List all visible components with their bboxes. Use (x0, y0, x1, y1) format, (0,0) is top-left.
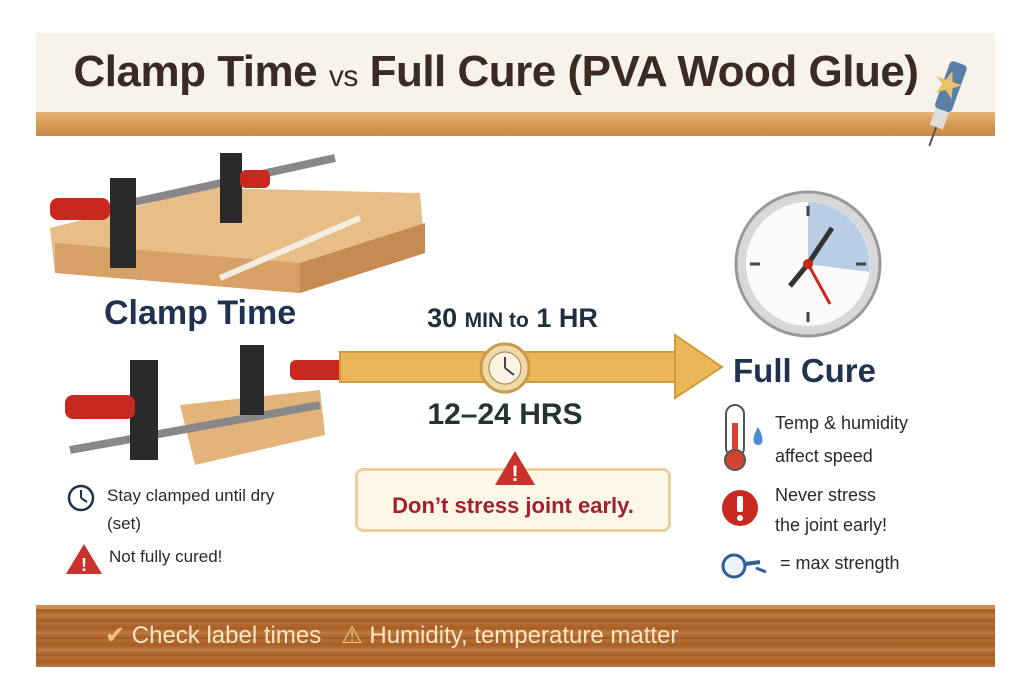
text: temp humidity: Temp & humidity (775, 413, 908, 433)
footer wood bar (36, 605, 995, 667)
text: stay clamped: (set) (107, 514, 141, 533)
text: not fully cured: Not fully cured! (109, 547, 222, 566)
clamp time value: 30 MIN to 1 HR (427, 303, 598, 333)
icon: clock outline (68, 484, 94, 512)
callout: warning: Don’t stress joint early. (392, 493, 634, 518)
text: temp humidity: affect speed (775, 446, 873, 466)
text: stay clamped (107, 486, 274, 533)
illustration: top clamp and boards (50, 153, 425, 293)
header panel (36, 33, 995, 136)
heading: full cure: Full Cure (733, 352, 876, 389)
icon: small clock (481, 344, 529, 392)
text: never stress (775, 485, 887, 535)
icon: warning triangle: ! (511, 461, 519, 486)
wood strip (36, 112, 995, 136)
icon: magnifier (722, 554, 766, 578)
text: never stress: Never stress (775, 485, 876, 505)
text: temp humidity (775, 413, 908, 466)
icon: big clock (734, 190, 882, 338)
heading: clamp time: Clamp Time (104, 294, 296, 332)
icon: red warning: ! (81, 555, 87, 575)
text: stay clamped: Stay clamped until dry (107, 486, 274, 505)
icon: red alert (722, 490, 758, 526)
callout: warning (355, 468, 671, 532)
icon: glue brush (928, 61, 967, 146)
icon: red warning (66, 544, 102, 575)
full cure value: 12–24 HRS (427, 398, 583, 431)
footer text: ✔ Check label times ⚠ Humidity, temperature matter (105, 622, 678, 649)
title: Clamp Time vs Full Cure (PVA Wood Glue) (74, 47, 918, 96)
illustration: bottom clamp (65, 345, 339, 465)
icon: warning triangle (495, 451, 535, 486)
icon: thermometer (724, 404, 762, 471)
arrow (339, 333, 724, 400)
text: max strength: = max strength (780, 553, 900, 573)
text: never stress: the joint early! (775, 515, 887, 535)
